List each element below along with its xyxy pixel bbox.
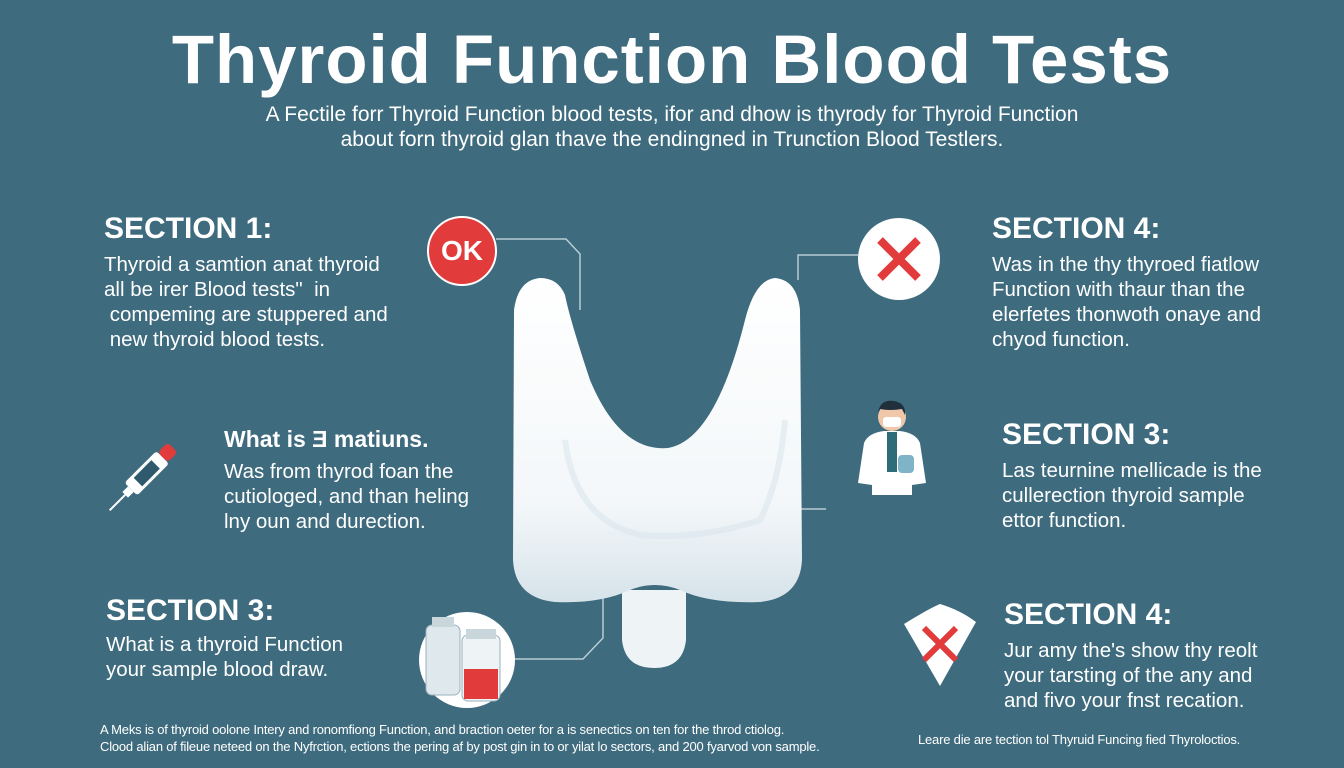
icon: OK badge: OK (441, 235, 483, 266)
section 4 right top: Was in the thy thyroed fiatlow (992, 253, 1259, 276)
title: Thyroid Function Blood Tests (172, 21, 1172, 98)
section 4 right bottom: SECTION 4: (1004, 598, 1172, 631)
section what is left: What is Ǝ matiuns. (224, 426, 428, 452)
subtitle (266, 103, 1078, 151)
footer text left: A Meks is of thyroid oolone Intery and ronomfiong Function, and braction oeter for a is senectics on ten for the throd ctiolog. (100, 722, 784, 737)
icon: doctor (858, 400, 926, 495)
section 3 right: cullerection thyroid sample (1002, 484, 1245, 507)
section 1 left: compeming are stuppered and (110, 303, 388, 326)
subtitle: about forn thyroid glan thave the endingned in Trunction Blood Testlers. (341, 128, 1003, 151)
section 1 left: all be irer Blood tests" in (104, 278, 330, 301)
section 3 right: ettor function. (1002, 509, 1126, 532)
section 1 left: new thyroid blood tests. (110, 328, 325, 351)
section 1 left (104, 212, 388, 351)
section 4 right bottom: your tarsting of the any and (1004, 664, 1252, 687)
section 4 right top (992, 212, 1261, 351)
section what is left: Was from thyrod foan the (224, 460, 453, 483)
icon: vials (419, 612, 515, 708)
section what is left (224, 426, 469, 533)
connector lines (496, 239, 858, 659)
section 4 right bottom: Jur amy the's show thy reolt (1004, 639, 1257, 662)
section 3 right (1002, 418, 1262, 532)
footer text right: Leare die are tection tol Thyruid Funcing fied Thyroloctios. (918, 732, 1240, 747)
footer text left (100, 722, 820, 754)
thyroid gland (513, 278, 802, 668)
section 4 right top: Function with thaur than the (992, 278, 1245, 301)
icon: syringe (109, 444, 176, 511)
section what is left: cutiologed, and than heling (224, 485, 469, 508)
footer text left: Clood alian of fileue neteed on the Nyfrction, ections the pering af by post gin in to or yilat lo sectors, and 200 fyarvod von sample. (100, 739, 820, 754)
section 3 left: SECTION 3: (106, 594, 274, 627)
section 1 left: SECTION 1: (104, 212, 272, 245)
icon: red X diamond (904, 604, 976, 686)
section 3 left: your sample blood draw. (106, 658, 328, 681)
section 4 right bottom: and fivo your fnst recation. (1004, 689, 1244, 712)
section 4 right top: chyod function. (992, 328, 1130, 351)
section 3 right: Las teurnine mellicade is the (1002, 459, 1262, 482)
section 3 left (106, 594, 343, 681)
section 1 left: Thyroid a samtion anat thyroid (104, 253, 380, 276)
icon: red X circle (858, 218, 940, 300)
section what is left: lny oun and durection. (224, 510, 426, 533)
section 4 right bottom (1004, 598, 1258, 712)
section 3 right: SECTION 3: (1002, 418, 1170, 451)
section 4 right top: SECTION 4: (992, 212, 1160, 245)
icon: OK badge (427, 216, 497, 286)
section 4 right top: elerfetes thonwoth onaye and (992, 303, 1261, 326)
section 3 left: What is a thyroid Function (106, 633, 343, 656)
subtitle: A Fectile forr Thyroid Function blood tests, ifor and dhow is thyrody for Thyroid Function (266, 103, 1078, 126)
